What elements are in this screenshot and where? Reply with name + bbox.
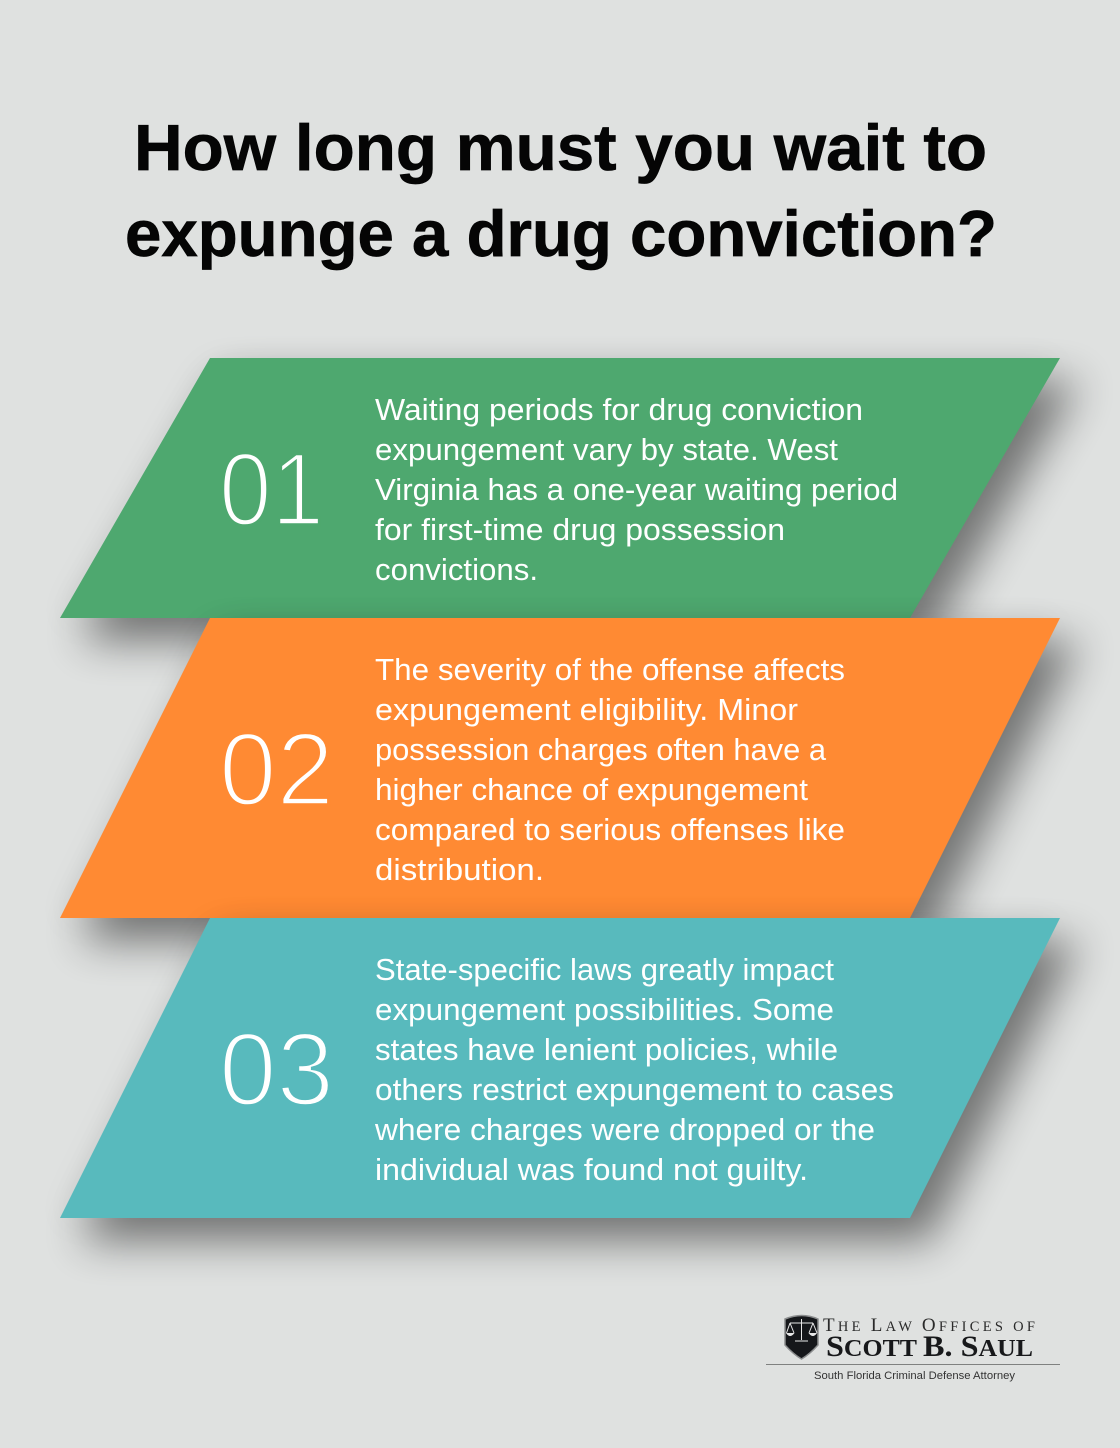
step 02 text: possession charges often have a (375, 732, 827, 767)
number 02: 02 (219, 712, 334, 828)
icon: shield with scales (785, 1316, 818, 1359)
logo firm line 2: SCOTT B. SAUL (826, 1330, 1033, 1363)
panel: step 02 (60, 618, 1060, 918)
logo: The Law Offices of Scott B. Saul (766, 1315, 1060, 1382)
step 01 text: Virginia has a one-year waiting period (375, 472, 898, 507)
panel: step 01 (60, 358, 1060, 618)
step 02 text: distribution. (375, 852, 544, 887)
teal parallelogram (60, 918, 1060, 1218)
step 01 text: expungement vary by state. West (375, 432, 838, 467)
step 03 text: expungement possibilities. Some (375, 992, 834, 1027)
step 03 text: states have lenient policies, while (375, 1032, 838, 1067)
title: expunge a drug conviction? (125, 197, 997, 270)
step 02 text: The severity of the offense affects (375, 652, 845, 687)
step 01 text: for first-time drug possession (375, 512, 785, 547)
panel: step 03 (60, 918, 1060, 1218)
step 01 text (375, 392, 898, 587)
step 03 text: where charges were dropped or the (374, 1112, 875, 1147)
step 01 text: convictions. (375, 552, 538, 587)
step 01 text: Waiting periods for drug conviction (375, 392, 863, 427)
step 03 text: individual was found not guilty. (375, 1152, 808, 1187)
logo tagline: South Florida Criminal Defense Attorney (814, 1370, 1016, 1382)
green parallelogram (60, 358, 1060, 618)
step 02 text: expungement eligibility. Minor (375, 692, 798, 727)
step 02 text (375, 652, 845, 887)
step 03 text: State-specific laws greatly impact (375, 952, 834, 987)
logo divider (766, 1364, 1060, 1365)
logo firm line 1: THE LAW OFFICES OF (823, 1315, 1035, 1336)
step 02 text: higher chance of expungement (375, 772, 808, 807)
step 02 text: compared to serious offenses like (375, 812, 845, 847)
orange parallelogram (60, 618, 1060, 918)
title: How long must you wait to (134, 111, 987, 184)
step 03 text: others restrict expungement to cases (375, 1072, 894, 1107)
step 03 text (374, 952, 894, 1187)
number 03: 03 (219, 1012, 334, 1128)
number 01: 01 (219, 432, 324, 548)
title (125, 111, 997, 270)
